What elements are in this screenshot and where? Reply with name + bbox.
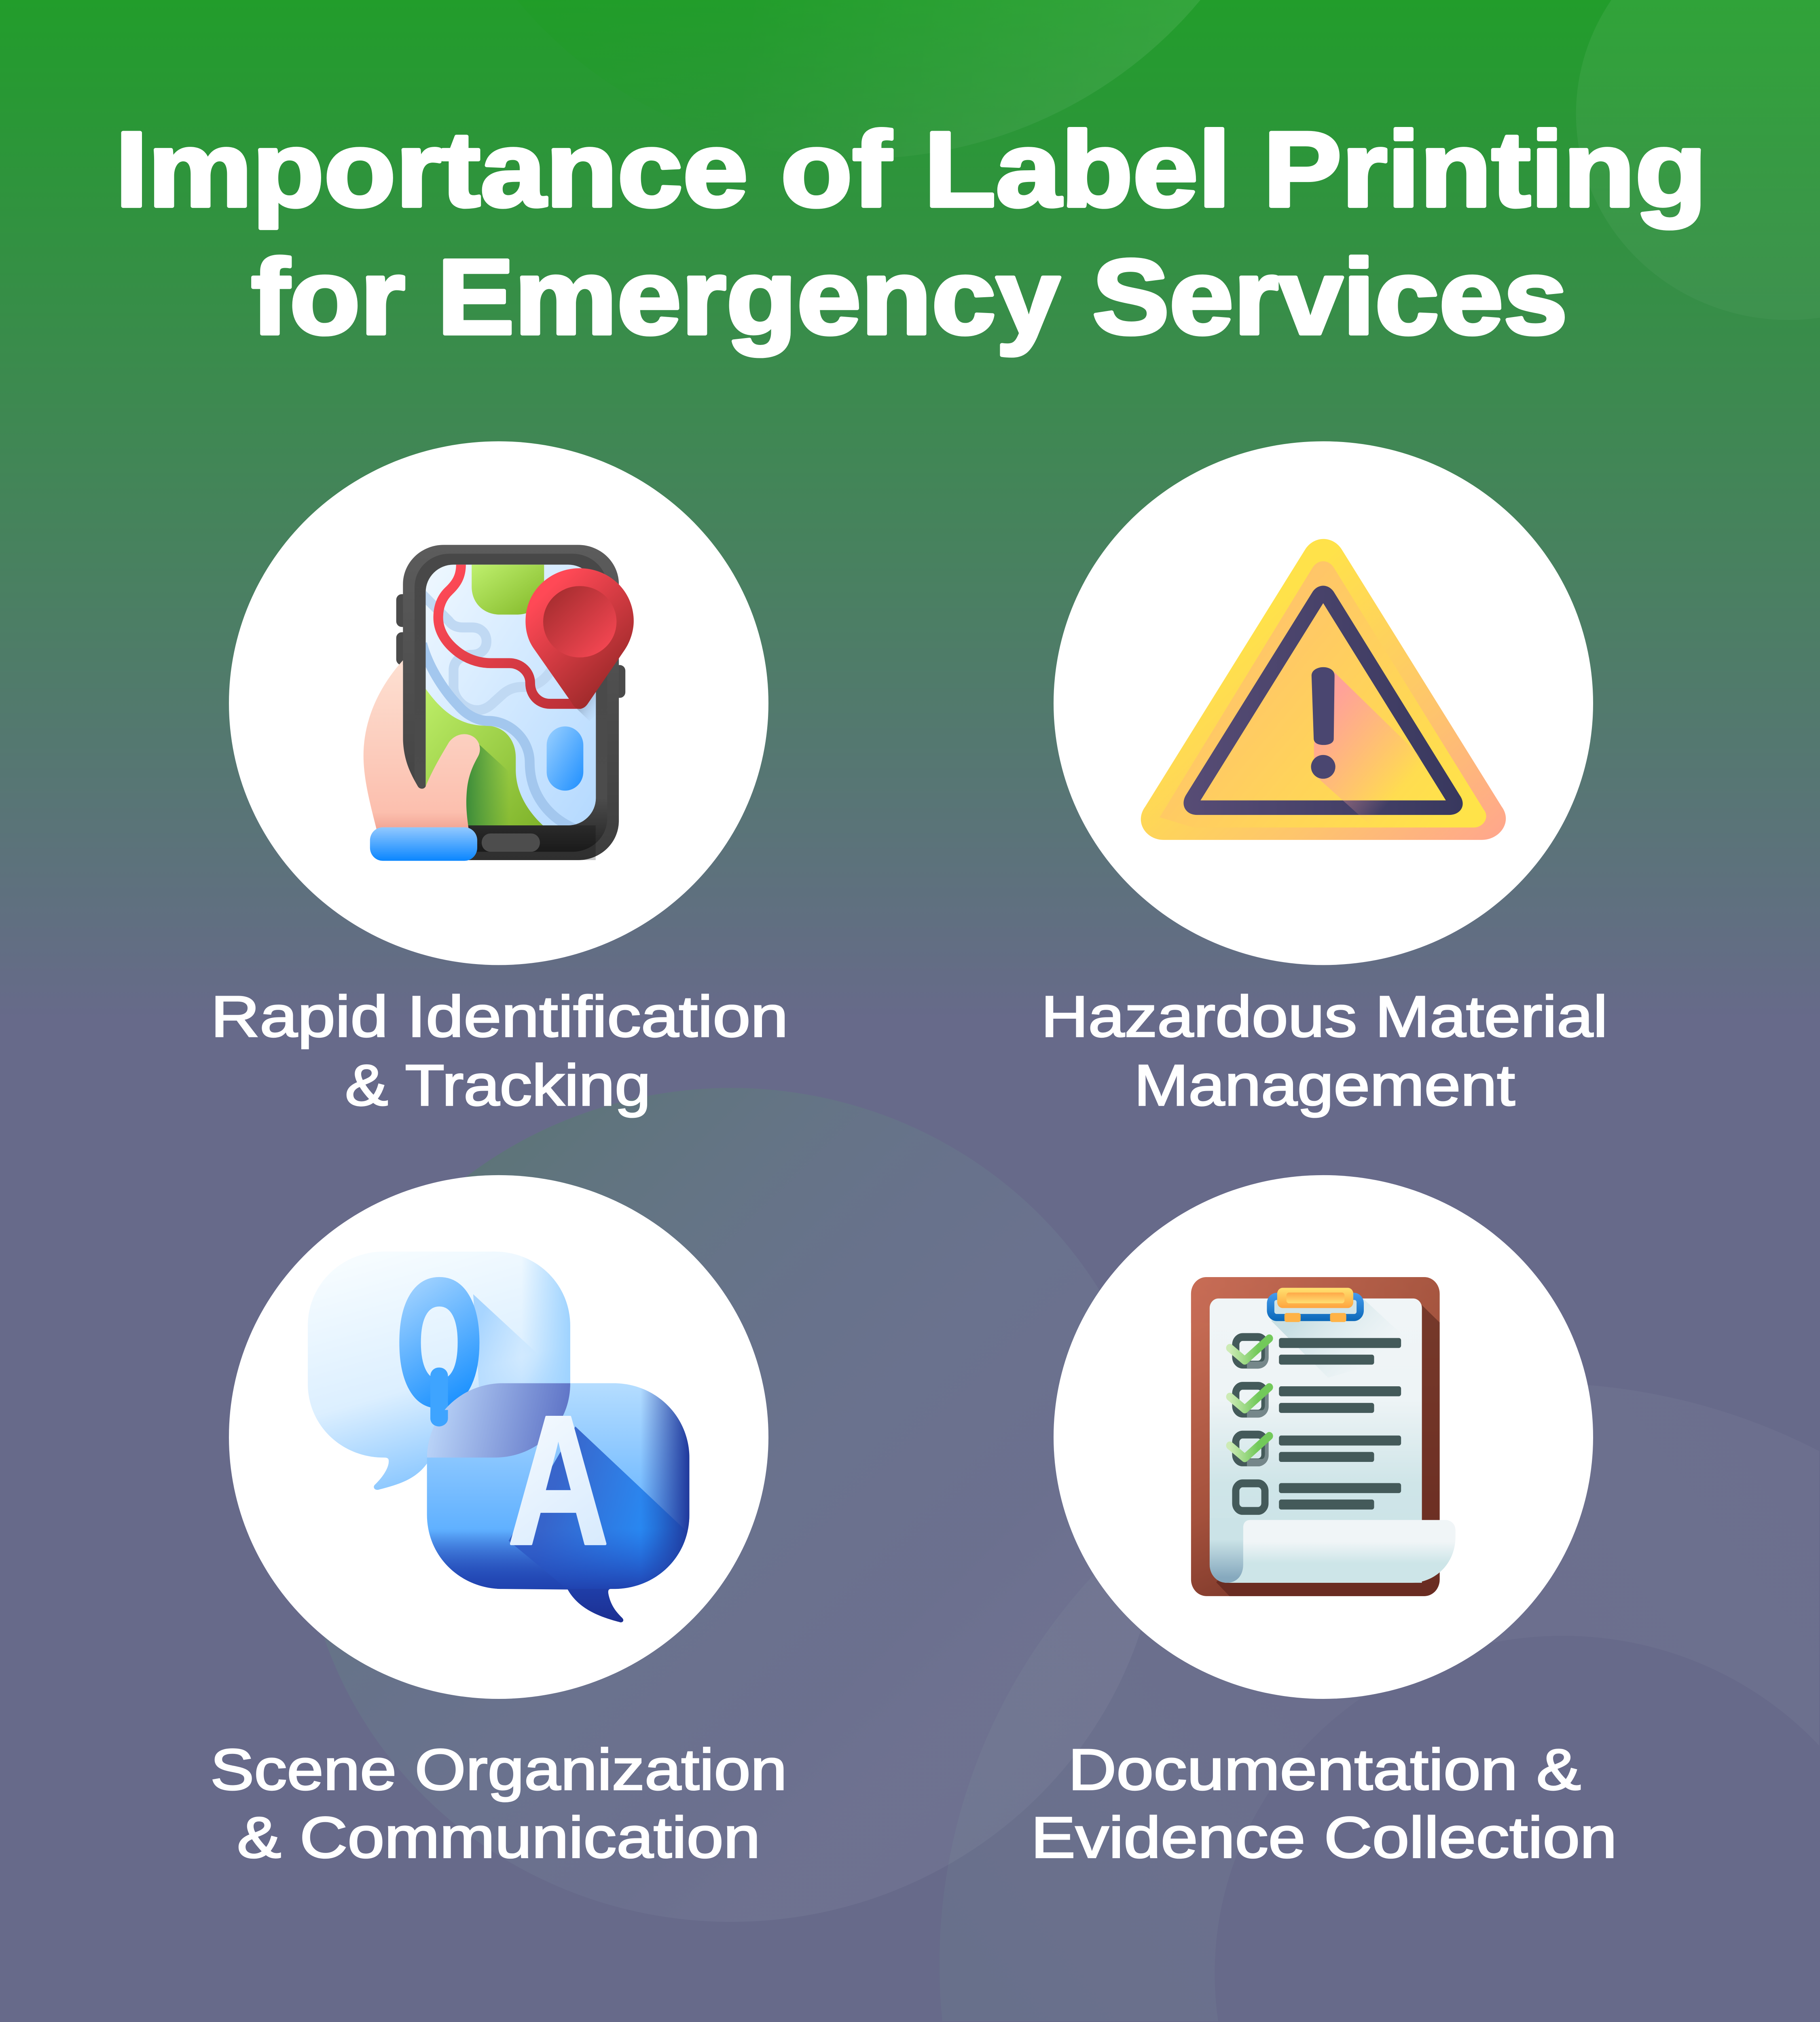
label: rapid identification [211, 984, 788, 1118]
title: for Emergency Services [251, 237, 1568, 357]
label: scene organization: & Communication [237, 1805, 760, 1870]
icon letter: Q: Q [398, 1246, 481, 1439]
icon: map pin [525, 568, 634, 709]
label: rapid identification: Rapid Identification [211, 984, 788, 1049]
label: rapid identification: & Tracking [345, 1053, 651, 1118]
icon: Q and A speech bubbles [308, 1246, 690, 1622]
label: hazardous material [1041, 984, 1608, 1118]
icon letter: A: A [508, 1377, 609, 1583]
checklist rows [1230, 1337, 1401, 1511]
label: scene organization [210, 1737, 787, 1870]
circle: hazardous material [1054, 441, 1593, 965]
label: documentation [1031, 1737, 1617, 1870]
label: documentation: Documentation & [1068, 1737, 1581, 1802]
panel: scene organization and communication [210, 1175, 787, 1870]
circle: documentation [1054, 1175, 1593, 1699]
title [115, 109, 1707, 357]
panel: documentation and evidence collection [1031, 1175, 1617, 1870]
label: hazardous material: Hazardous Material [1041, 984, 1608, 1049]
circle: rapid identification [229, 441, 768, 965]
panel: rapid identification and tracking [211, 441, 788, 1118]
icon: phone with map and hand [364, 545, 634, 861]
icon: clip [1267, 1288, 1364, 1322]
icon: clipboard checklist [1191, 1277, 1456, 1596]
title: Importance of Label Printing [115, 109, 1707, 229]
icon: warning triangle [1141, 539, 1506, 840]
label: hazardous material: Management [1134, 1053, 1515, 1118]
circle: scene organization [229, 1175, 768, 1699]
label: documentation: Evidence Collection [1031, 1805, 1617, 1870]
panel: hazardous material management [1041, 441, 1608, 1118]
label: scene organization: Scene Organization [210, 1737, 787, 1802]
